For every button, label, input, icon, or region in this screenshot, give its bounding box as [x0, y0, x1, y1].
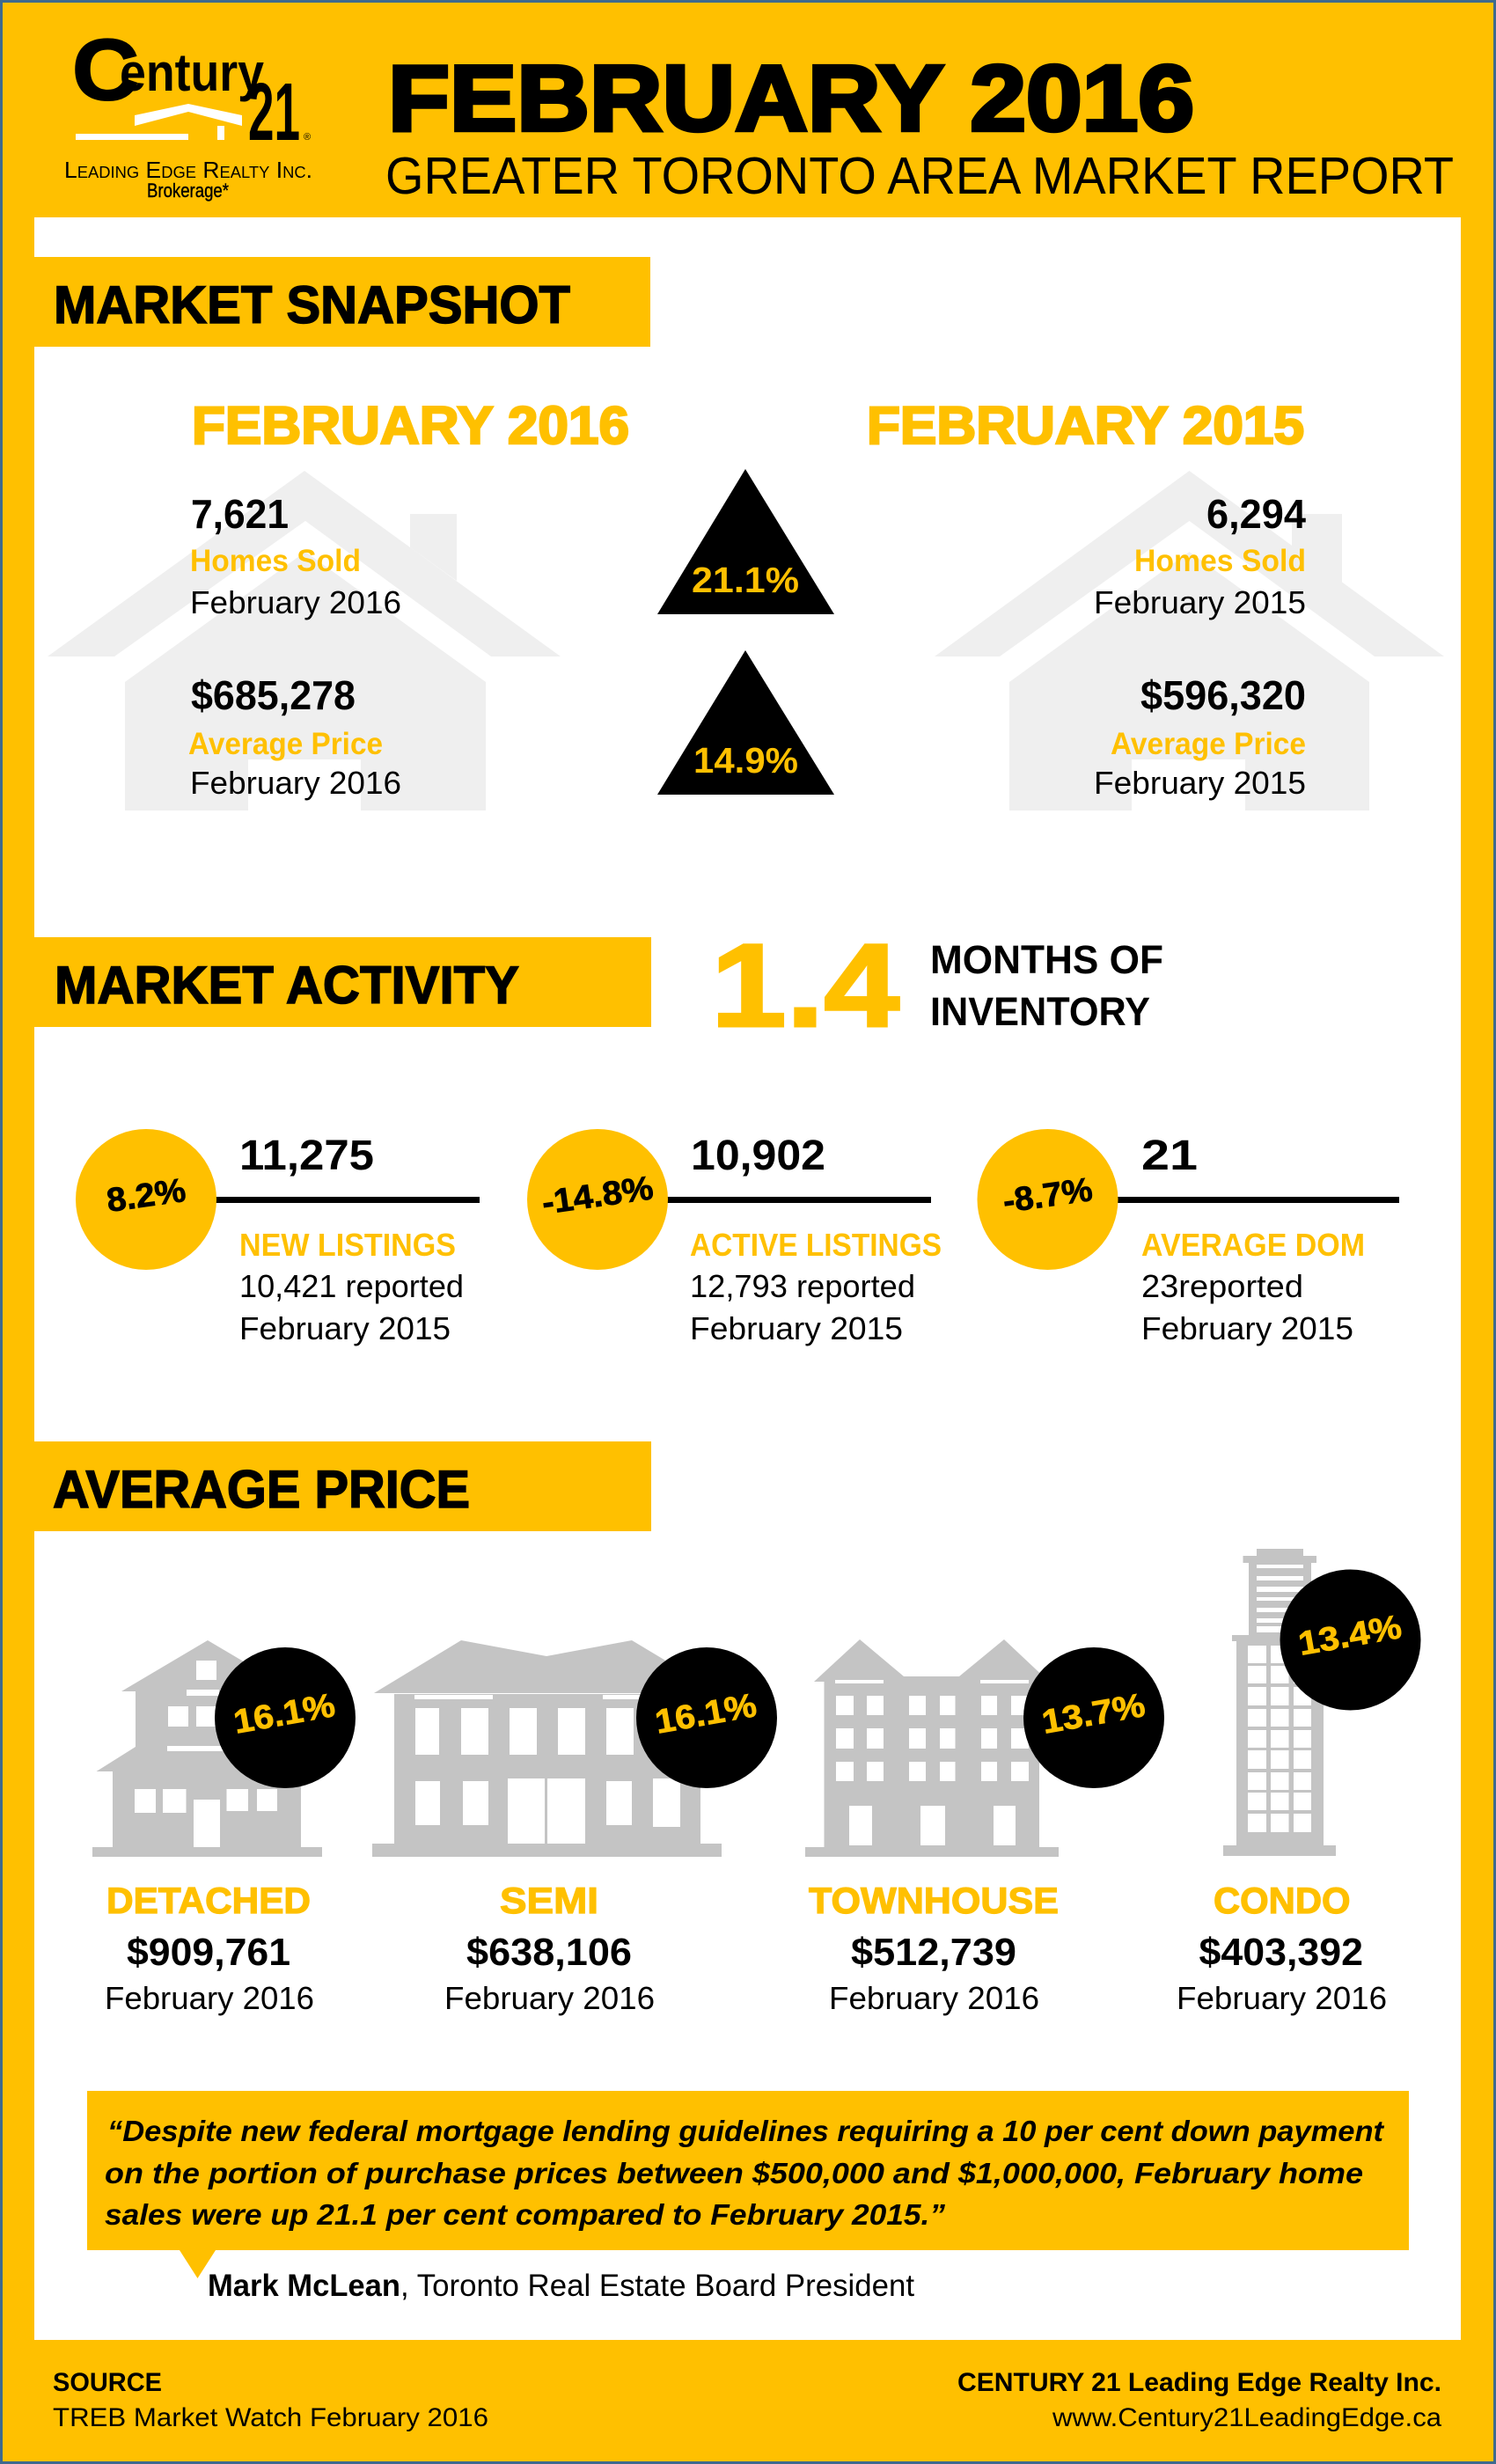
metric: active listings: 12,793 reported — [690, 1268, 915, 1304]
heading: market activity — [34, 937, 651, 1027]
metric: new listings: 8.2% — [105, 1172, 188, 1220]
footer: source: SOURCE — [53, 2368, 162, 2397]
callout: quote: sales were up 21.1 per cent compared to February 2015.” — [105, 2198, 946, 2231]
metric: active listings: -14.8% — [539, 1170, 656, 1222]
price: semi: SEMI — [500, 1880, 598, 1921]
metric: average DOM: February 2015 — [1141, 1310, 1353, 1346]
stat: average price 2015 — [1094, 672, 1306, 801]
callout: quote — [87, 2091, 1409, 2278]
metric: average DOM: 21 — [1141, 1133, 1198, 1179]
heading: average price — [34, 1441, 651, 1531]
attribution: , Toronto Real Estate Board President — [400, 2269, 914, 2303]
metric: average DOM: AVERAGE DOM — [1141, 1227, 1365, 1263]
metric: new listings: 11,275 — [239, 1133, 374, 1179]
icon: faint house right — [935, 471, 1444, 810]
badge: condo change: 13.4% — [1295, 1609, 1404, 1663]
change triangle: average price — [657, 650, 834, 795]
stat: average price 2015: February 2015 — [1094, 765, 1306, 801]
icon: faint house left — [48, 471, 561, 810]
badge: townhouse change — [1023, 1647, 1164, 1788]
big number: 1.4 months of inventory: MONTHS OF — [930, 937, 1163, 982]
subtitle: GREATER TORONTO AREA MARKET REPORT — [385, 147, 1454, 205]
badge: condo change — [1280, 1570, 1420, 1711]
price: townhouse: February 2016 — [829, 1980, 1039, 2016]
price: semi: $638,106 — [466, 1931, 632, 1974]
stat: homes sold 2016: 7,621 — [191, 491, 289, 537]
stat: average price 2015: Average Price — [1111, 727, 1306, 761]
big number: 1.4 months of inventory: 1.4 — [711, 920, 899, 1052]
logo: Century 21 Leading Edge Realty: C — [72, 21, 139, 118]
stat: homes sold 2015 — [1094, 491, 1306, 620]
change triangle: homes sold: 21.1% — [692, 560, 799, 600]
metric: active listings: February 2015 — [690, 1310, 903, 1346]
price: condo: CONDO — [1214, 1880, 1350, 1921]
logo: Century 21 Leading Edge Realty — [64, 21, 312, 202]
price: townhouse: $512,739 — [851, 1931, 1016, 1974]
footer: source: TREB Market Watch February 2016 — [53, 2403, 488, 2432]
big number: 1.4 months of inventory: INVENTORY — [930, 989, 1150, 1034]
panel: market snapshot — [34, 257, 1444, 810]
badge: detached change — [215, 1647, 356, 1788]
icon: townhouse — [805, 1639, 1059, 1857]
footer: company: www.Century21LeadingEdge.ca — [1052, 2403, 1441, 2432]
metric: active listings — [527, 1129, 942, 1346]
price: condo — [1177, 1880, 1387, 2016]
price: townhouse: TOWNHOUSE — [809, 1880, 1059, 1921]
heading: market snapshot: MARKET SNAPSHOT — [54, 275, 570, 334]
title: FEBRUARY 2016 — [388, 47, 1194, 150]
price: detached: $909,761 — [127, 1931, 290, 1974]
badge: semi change: 16.1% — [652, 1687, 759, 1742]
price: detached — [105, 1880, 314, 2016]
column heading: February 2016: FEBRUARY 2016 — [192, 396, 629, 455]
heading: average price: AVERAGE PRICE — [53, 1460, 470, 1519]
change triangle: homes sold — [657, 469, 834, 614]
icon: detached house — [92, 1640, 322, 1857]
footer: company: CENTURY 21 Leading Edge Realty Inc. — [957, 2368, 1441, 2397]
stat: average price 2016: $685,278 — [191, 672, 356, 718]
price: condo: $403,392 — [1199, 1931, 1363, 1974]
metric: average DOM: 23reported — [1141, 1268, 1303, 1304]
stat: homes sold 2015: February 2015 — [1094, 584, 1306, 620]
metric: new listings: 10,421 reported — [239, 1268, 464, 1304]
metric: average DOM: -8.7% — [1001, 1171, 1095, 1221]
panel: market activity — [34, 920, 1399, 1346]
callout: quote: “Despite new federal mortgage lending guidelines requiring a 10 per cent down payment — [107, 2115, 1385, 2147]
price: detached: February 2016 — [105, 1980, 314, 2016]
stat: average price 2016: Average Price — [188, 727, 383, 761]
metric: active listings: ACTIVE LISTINGS — [690, 1227, 942, 1263]
column heading: February 2015: FEBRUARY 2015 — [867, 396, 1304, 455]
stat: homes sold 2015: Homes Sold — [1134, 544, 1306, 578]
heading: market activity: MARKET ACTIVITY — [55, 956, 519, 1015]
logo: Century 21 Leading Edge Realty: Leading Edge Realty Inc. — [64, 157, 312, 183]
callout: quote: on the portion of purchase prices between $500,000 and $1,000,000, February home — [105, 2157, 1363, 2189]
icon: condo tower — [1223, 1549, 1336, 1856]
stat: homes sold 2016 — [190, 491, 401, 620]
logo: Century 21 Leading Edge Realty: Brokerage* — [147, 180, 229, 202]
logo: Century 21 Leading Edge Realty: ® — [304, 132, 311, 143]
stat: homes sold 2016: Homes Sold — [190, 544, 361, 578]
price: semi — [444, 1880, 655, 2016]
stat: homes sold 2015: 6,294 — [1206, 491, 1306, 537]
stat: average price 2015: $596,320 — [1140, 672, 1306, 718]
price: townhouse — [809, 1880, 1059, 2016]
price: condo: February 2016 — [1177, 1980, 1387, 2016]
price: detached: DETACHED — [106, 1880, 311, 1921]
stat: homes sold 2016: February 2016 — [190, 584, 401, 620]
stat: average price 2016 — [188, 672, 401, 801]
badge: semi change — [636, 1647, 777, 1788]
metric: new listings: NEW LISTINGS — [239, 1227, 456, 1263]
badge: detached change: 16.1% — [231, 1687, 338, 1742]
logo: Century 21 Leading Edge Realty: 21 — [248, 66, 300, 158]
stat: average price 2016: February 2016 — [190, 765, 401, 801]
heading: market snapshot — [34, 257, 650, 347]
price: semi: February 2016 — [444, 1980, 655, 2016]
attribution: Mark McLean — [208, 2269, 400, 2303]
logo: Century 21 Leading Edge Realty: entury — [120, 43, 265, 102]
badge: townhouse change: 13.7% — [1039, 1687, 1148, 1742]
icon: semi house — [372, 1640, 722, 1857]
metric: average DOM — [977, 1129, 1399, 1346]
metric: new listings — [76, 1129, 480, 1346]
metric: active listings: 10,902 — [691, 1133, 825, 1179]
footer: company — [957, 2368, 1441, 2432]
change triangle: average price: 14.9% — [693, 740, 798, 781]
metric: new listings: February 2015 — [239, 1310, 451, 1346]
panel: average price — [34, 1441, 1420, 2016]
big number: 1.4 months of inventory — [711, 920, 1163, 1052]
footer: source — [53, 2368, 488, 2432]
